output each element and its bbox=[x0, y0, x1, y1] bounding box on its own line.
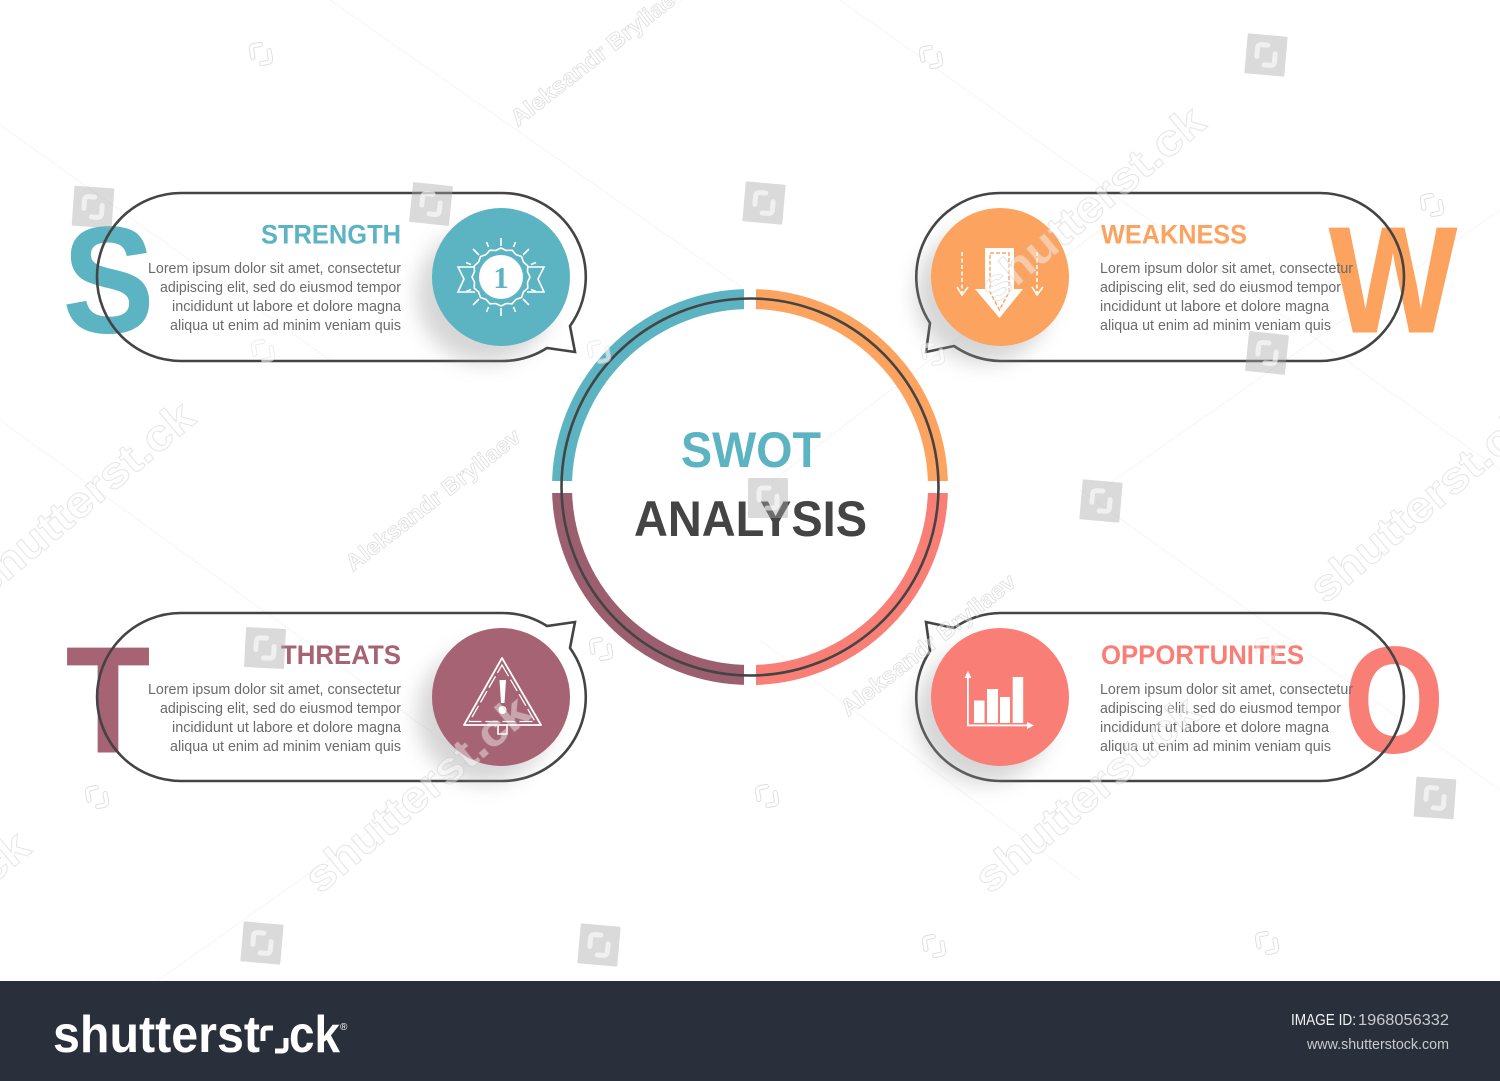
speech bubble outline bbox=[97, 193, 586, 361]
speech bubble outline bbox=[916, 193, 1404, 361]
icon: bar chart bbox=[964, 671, 1034, 729]
watermark: diagonal text: Aleksandr Bryliaev bbox=[340, 423, 526, 576]
footer image id: IMAGE ID: bbox=[1291, 1012, 1356, 1029]
panel: strength bbox=[97, 193, 586, 363]
body text: Lorem ipsum dolor sit amet, consectetur bbox=[148, 261, 401, 277]
footer id number: 1968056332 bbox=[1358, 1012, 1449, 1029]
ring segment: opportunities bbox=[750, 487, 938, 675]
body text: Lorem ipsum dolor sit amet, consectetur bbox=[148, 682, 401, 698]
heading: OPPORTUNITES bbox=[1101, 640, 1304, 670]
watermark: small outlined marks bbox=[87, 43, 1442, 957]
icon circle bbox=[931, 208, 1069, 346]
ring segment: strength bbox=[562, 299, 750, 487]
footer logo: shutterst bbox=[53, 1006, 260, 1064]
body text bbox=[148, 261, 402, 334]
icon: warning triangle bbox=[464, 658, 541, 734]
footer bar bbox=[0, 981, 1500, 1081]
big letter T: T bbox=[66, 615, 150, 784]
body text: adipiscing elit, sed do eiusmod tempor bbox=[1100, 280, 1341, 296]
ring segment: threats bbox=[562, 487, 750, 675]
panel: weakness bbox=[916, 193, 1404, 363]
body text: incididunt ut labore et dolore magna bbox=[1100, 720, 1330, 736]
speech bubble outline bbox=[916, 613, 1404, 781]
big letter O: O bbox=[1344, 615, 1444, 784]
heading: WEAKNESS bbox=[1101, 220, 1247, 250]
heading: THREATS bbox=[281, 640, 401, 670]
panel: opportunities bbox=[916, 613, 1404, 783]
watermark: grey square marks bbox=[72, 33, 1456, 967]
big letter S: S bbox=[63, 195, 154, 364]
ring outline bbox=[562, 298, 938, 676]
body text bbox=[148, 682, 402, 755]
icon: ribbon badge: 1 bbox=[493, 260, 509, 295]
heading: STRENGTH bbox=[261, 220, 401, 250]
body text: Lorem ipsum dolor sit amet, consectetur bbox=[1100, 682, 1353, 698]
body text: adipiscing elit, sed do eiusmod tempor bbox=[160, 280, 401, 296]
body text: incididunt ut labore et dolore magna bbox=[172, 720, 402, 736]
body text: Lorem ipsum dolor sit amet, consectetur bbox=[1100, 261, 1353, 277]
footer logo: ck bbox=[289, 1006, 340, 1064]
watermark: diagonal text: shutterst.ck bbox=[295, 686, 540, 903]
central ring bbox=[545, 280, 955, 694]
icon: ribbon badge bbox=[458, 238, 544, 316]
body text: adipiscing elit, sed do eiusmod tempor bbox=[1100, 701, 1341, 717]
icon circle bbox=[432, 208, 570, 346]
body text: aliqua ut enim ad minim veniam quis bbox=[1100, 739, 1331, 755]
body text: incididunt ut labore et dolore magna bbox=[1100, 299, 1330, 315]
title word ANALYSIS: ANALYSIS bbox=[634, 491, 867, 547]
icon: down arrows bbox=[957, 248, 1043, 318]
body text: incididunt ut labore et dolore magna bbox=[172, 299, 402, 315]
title bbox=[634, 422, 867, 547]
ring segment: weakness bbox=[750, 299, 938, 487]
body text: adipiscing elit, sed do eiusmod tempor bbox=[160, 701, 401, 717]
footer url: www.shutterstock.com bbox=[1306, 1036, 1449, 1053]
body text bbox=[1100, 682, 1353, 755]
icon circle bbox=[432, 628, 570, 766]
big letter W: W bbox=[1329, 195, 1457, 364]
body text: aliqua ut enim ad minim veniam quis bbox=[1100, 318, 1331, 334]
panel: threats bbox=[97, 613, 586, 783]
watermark: diagonal text: shutterst.ck bbox=[965, 686, 1210, 903]
watermark: diagonal text: Aleksandr Bryliaev bbox=[835, 568, 1021, 721]
footer registered mark: ® bbox=[340, 1022, 348, 1033]
speech bubble outline bbox=[97, 613, 586, 781]
icon circle bbox=[931, 628, 1069, 766]
watermark: diagonal text: shutterst.ck bbox=[970, 96, 1215, 313]
title word SWOT: SWOT bbox=[681, 422, 821, 478]
body text: aliqua ut enim ad minim veniam quis bbox=[170, 739, 401, 755]
body text: aliqua ut enim ad minim veniam quis bbox=[170, 318, 401, 334]
body text bbox=[1100, 261, 1353, 334]
